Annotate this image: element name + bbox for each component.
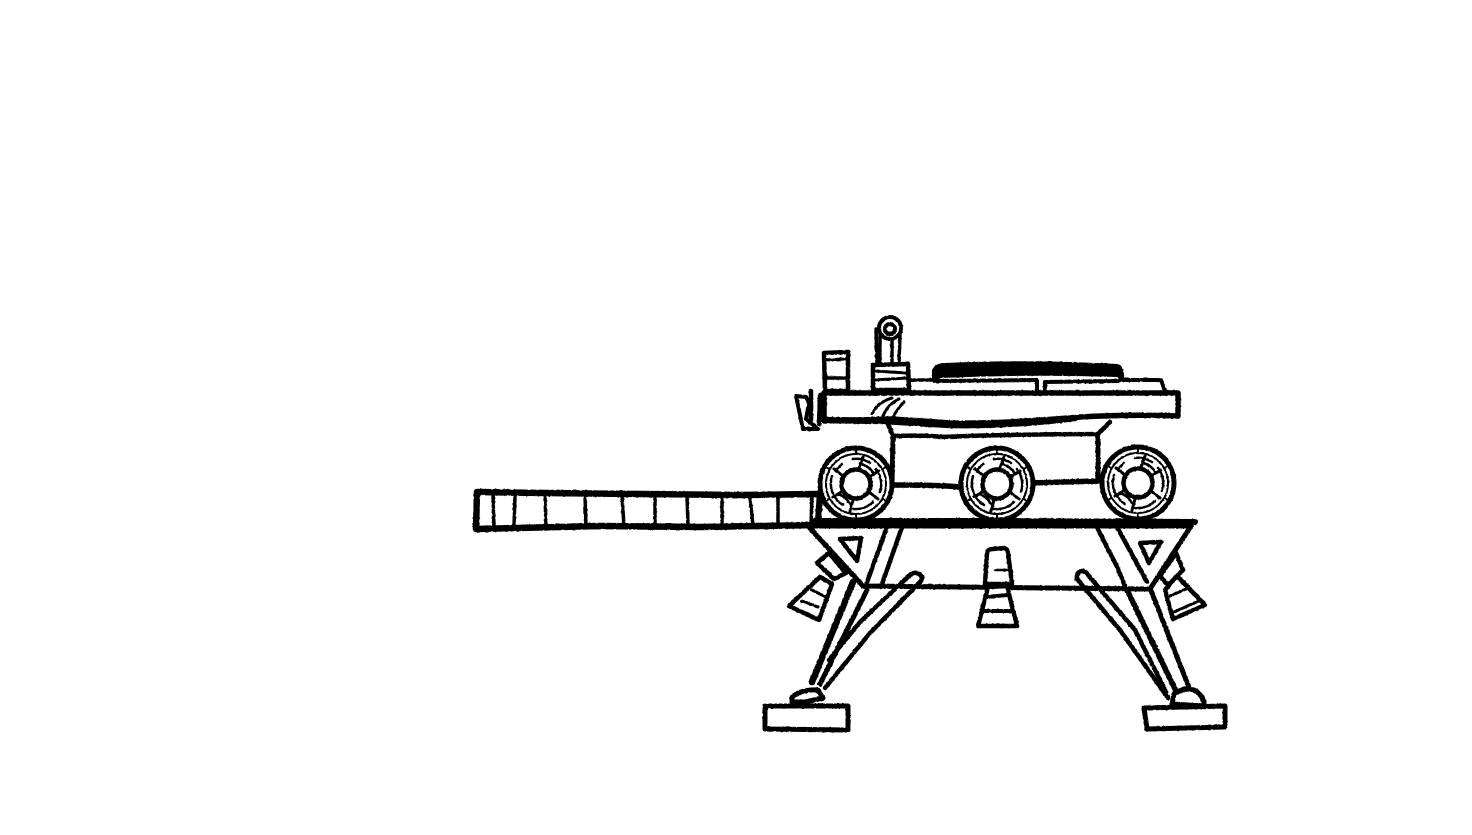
right landing leg — [1077, 571, 1225, 729]
camera mast — [873, 317, 909, 390]
extended ramp — [476, 492, 820, 529]
right thruster — [1160, 553, 1205, 619]
left thruster bracket — [840, 538, 861, 561]
centre engine nozzle — [978, 548, 1017, 626]
right foot pad — [1144, 706, 1225, 729]
right thruster bracket — [1140, 542, 1161, 563]
left foot joint — [792, 690, 823, 702]
rover deck — [824, 393, 1178, 425]
lander platform — [808, 521, 1195, 589]
rover wheels — [820, 447, 1174, 520]
rover body — [888, 422, 1110, 487]
solar panels — [908, 363, 1165, 391]
front hook arm — [796, 391, 820, 429]
left landing leg — [765, 573, 922, 730]
left thruster — [789, 553, 846, 620]
right foot joint — [1172, 689, 1204, 706]
instrument box — [824, 352, 848, 391]
left foot pad — [765, 706, 848, 730]
